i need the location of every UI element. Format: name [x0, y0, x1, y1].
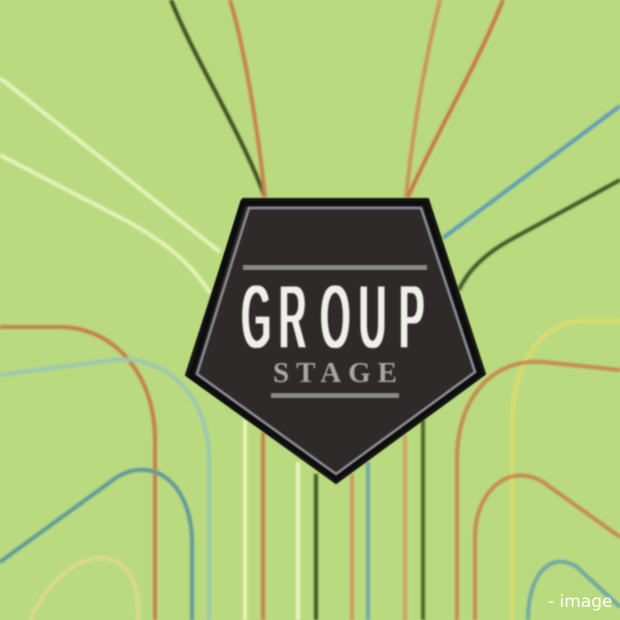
- upper rule: [243, 265, 427, 270]
- heading: GROUP: GROUP: [242, 269, 424, 367]
- pentagon black edge: [191, 203, 480, 478]
- caption: image label: - image: [548, 592, 612, 612]
- pentagon inner outline: [197, 208, 475, 474]
- lower rule: [271, 393, 399, 398]
- pentagon shape: [186, 199, 485, 483]
- badge: group stage pentagon: [186, 199, 485, 483]
- subheading: STAGE: STAGE: [273, 357, 397, 389]
